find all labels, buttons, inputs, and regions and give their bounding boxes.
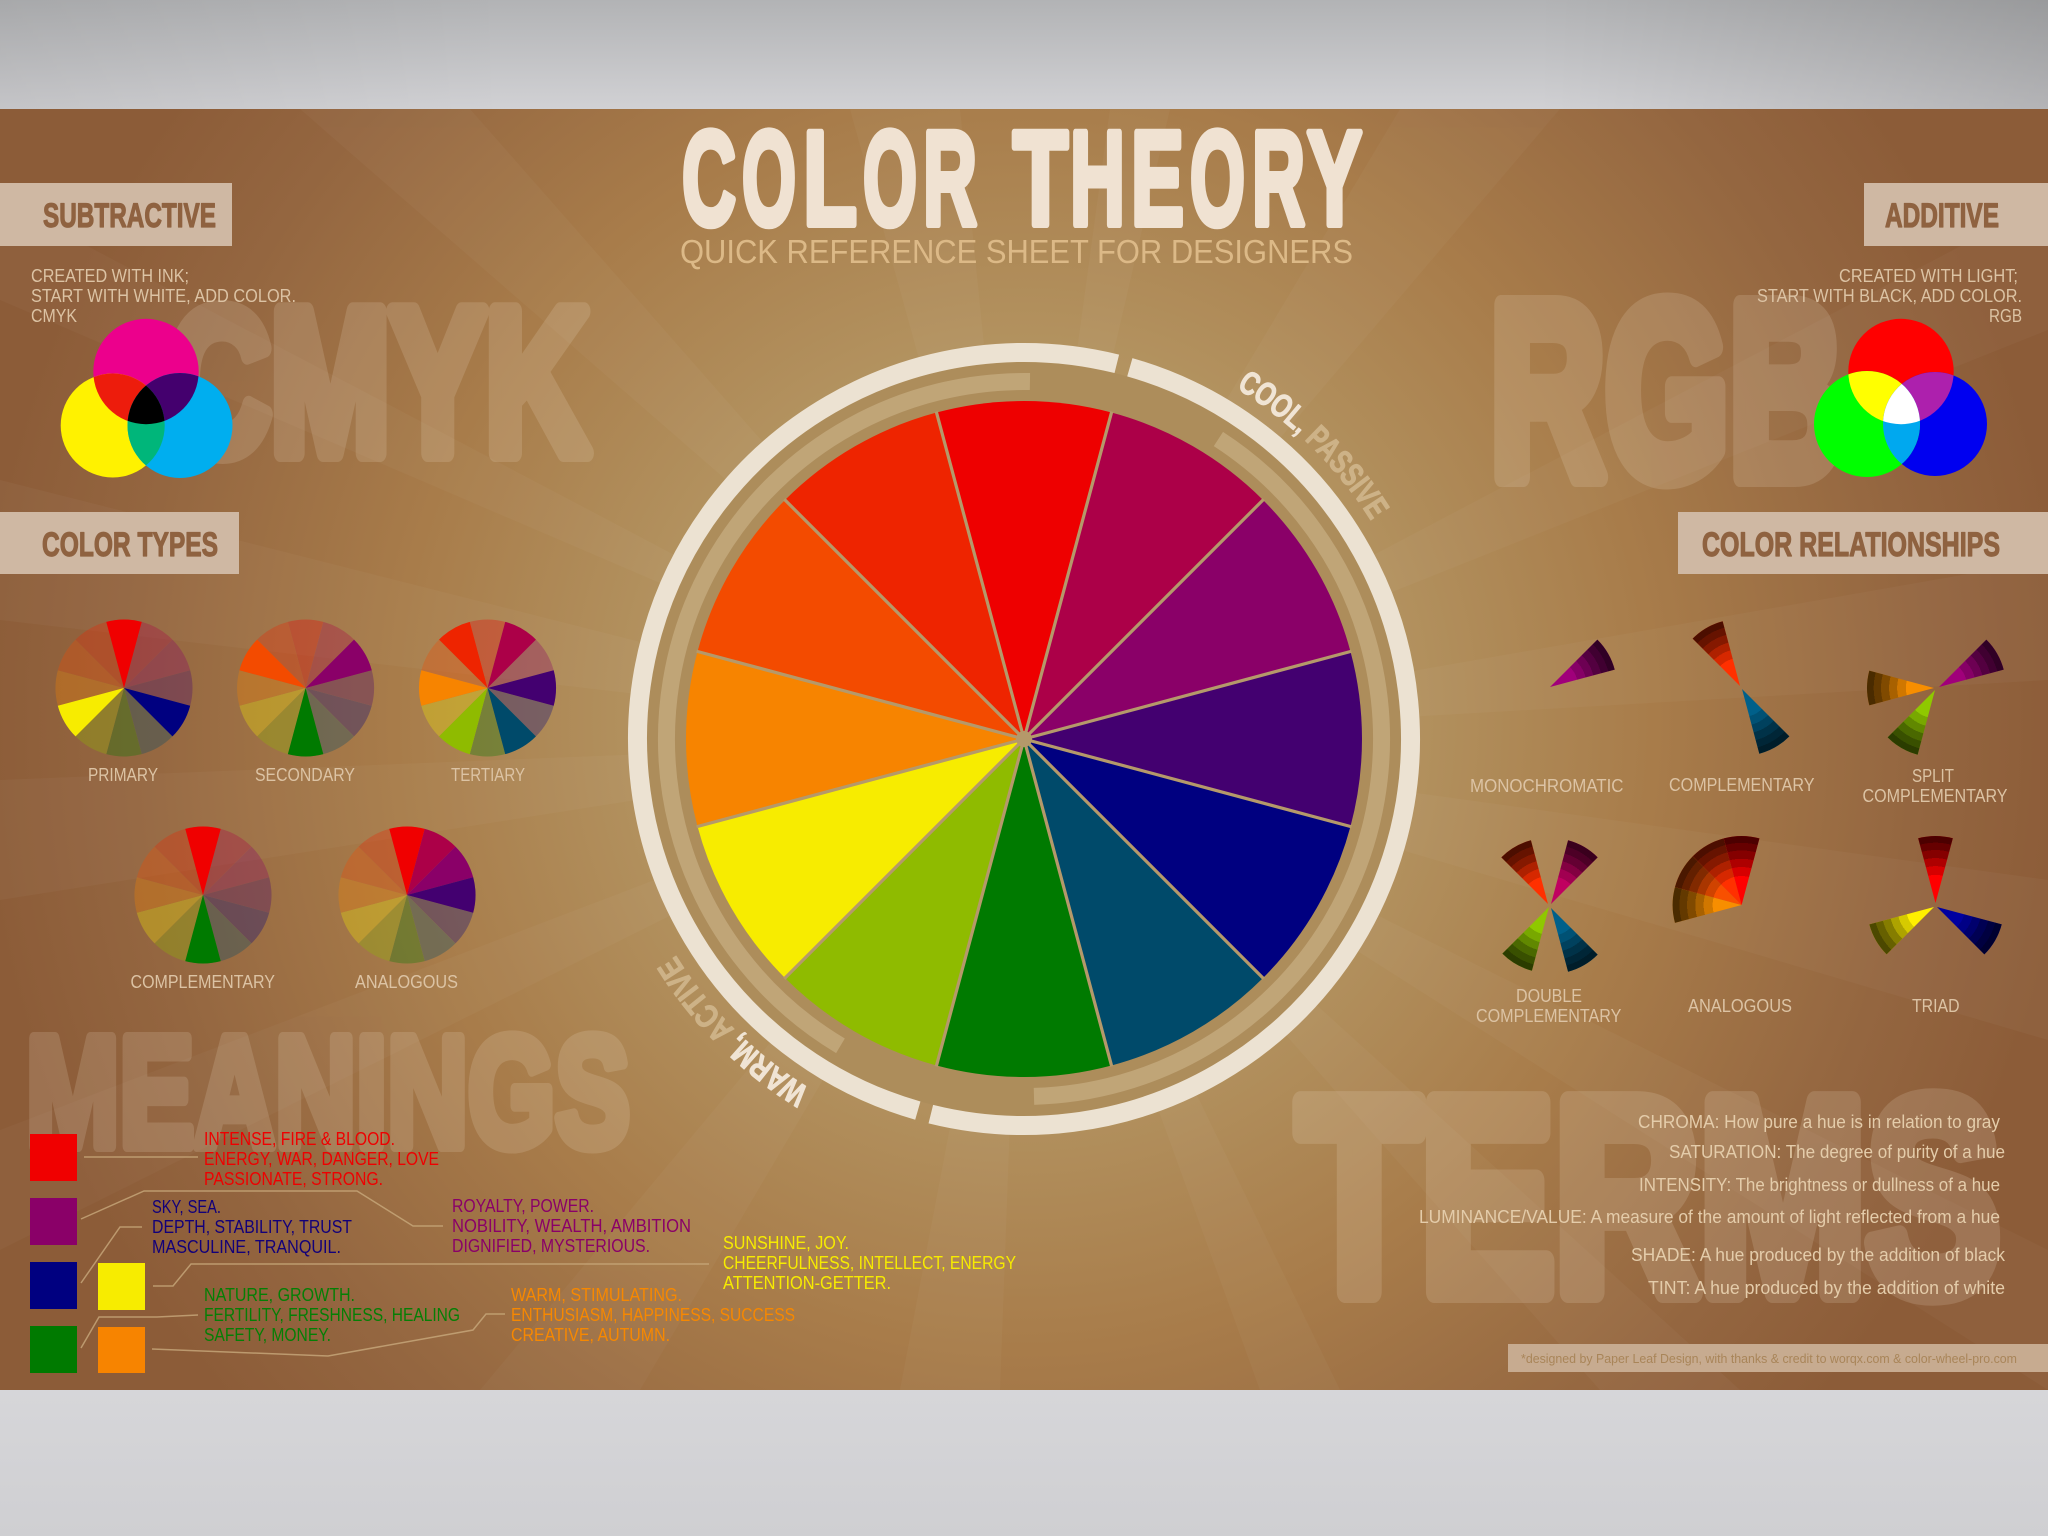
chart: main color wheel bbox=[533, 248, 1515, 1230]
title: C bbox=[682, 104, 736, 254]
label: triad: TRIAD bbox=[1912, 996, 1960, 1016]
icon: RGB venn diagram bbox=[1814, 319, 1987, 477]
legend: meanings swatches bbox=[30, 1134, 145, 1373]
panel: subtractive heading bbox=[0, 183, 232, 246]
wheel wedges bbox=[686, 401, 1362, 1077]
title: R bbox=[923, 104, 977, 254]
label: cool, passive arc text: COOL, PASSIVE bbox=[1240, 372, 1390, 520]
title: L bbox=[803, 104, 857, 254]
panel: additive heading bbox=[1864, 183, 2048, 246]
text: purple meaning: NOBILITY, WEALTH, AMBITION bbox=[452, 1216, 691, 1236]
pie: secondary bbox=[237, 620, 374, 756]
ghost word: CMYK: CMYK bbox=[167, 267, 589, 497]
text: subtractive description: CMYK bbox=[31, 306, 77, 326]
text: additive description: START WITH BLACK, ADD COLOR. bbox=[1757, 286, 2022, 306]
title: O bbox=[863, 104, 917, 254]
label: primary: PRIMARY bbox=[88, 765, 158, 785]
panel: color types heading: COLOR TYPES bbox=[42, 526, 218, 564]
text: terms definitions: CHROMA: How pure a hue is in relation to gray bbox=[1638, 1112, 2000, 1132]
text: orange meaning: CREATIVE, AUTUMN. bbox=[511, 1325, 670, 1345]
label: warm, active arc text: WARM, ACTIVE bbox=[656, 956, 806, 1108]
footer credit bbox=[1508, 1344, 2048, 1372]
text: terms definitions: SHADE: A hue produced by the addition of black bbox=[1631, 1245, 2006, 1265]
label: complementary: COMPLEMENTARY bbox=[130, 972, 275, 992]
text: additive description bbox=[1757, 266, 2022, 326]
text: purple meaning: DIGNIFIED, MYSTERIOUS. bbox=[452, 1236, 650, 1256]
text: terms definitions: INTENSITY: The brightness or dullness of a hue bbox=[1639, 1175, 2000, 1195]
label: analogous relationship: ANALOGOUS bbox=[1688, 996, 1792, 1016]
icon: CMY venn diagram bbox=[61, 319, 232, 478]
text: terms definitions: LUMINANCE/VALUE: A measure of the amount of light reflected from a hue bbox=[1419, 1207, 2000, 1227]
wedge separators bbox=[697, 412, 1351, 1066]
subtitle: QUICK REFERENCE SHEET FOR DESIGNERS bbox=[680, 233, 1353, 270]
label: split complementary: SPLIT bbox=[1912, 766, 1954, 786]
text: purple meaning: ROYALTY, POWER. bbox=[452, 1196, 594, 1216]
text: yellow meaning: ATTENTION-GETTER. bbox=[723, 1273, 891, 1293]
pie: primary bbox=[56, 620, 192, 756]
label: analogous: ANALOGOUS bbox=[355, 972, 458, 992]
text: red meaning bbox=[204, 1129, 439, 1189]
text: orange meaning: WARM, STIMULATING. bbox=[511, 1285, 682, 1305]
panel: subtractive heading: SUBTRACTIVE bbox=[43, 197, 216, 235]
text: blue meaning: DEPTH, STABILITY, TRUST bbox=[152, 1217, 352, 1237]
title: H bbox=[1070, 104, 1125, 254]
title: O bbox=[1190, 104, 1245, 254]
label: double complementary: DOUBLE bbox=[1516, 986, 1582, 1006]
label: secondary: SECONDARY bbox=[255, 765, 355, 785]
title: Y bbox=[1307, 104, 1362, 254]
text: yellow meaning: SUNSHINE, JOY. bbox=[723, 1233, 849, 1253]
text: green meaning bbox=[204, 1285, 460, 1345]
text: green meaning: SAFETY, MONEY. bbox=[204, 1325, 331, 1345]
text: red meaning: ENERGY, WAR, DANGER, LOVE bbox=[204, 1149, 439, 1169]
panel: color types heading bbox=[0, 512, 239, 574]
panel: additive heading: ADDITIVE bbox=[1885, 197, 1999, 235]
text: purple meaning bbox=[452, 1196, 691, 1256]
text: subtractive description: START WITH WHITE, ADD COLOR. bbox=[31, 286, 296, 306]
title: E bbox=[1131, 104, 1184, 254]
text: subtractive description bbox=[31, 266, 296, 326]
text: green meaning: FERTILITY, FRESHNESS, HEALING bbox=[204, 1305, 460, 1325]
text: blue meaning: SKY, SEA. bbox=[152, 1197, 221, 1217]
text: orange meaning bbox=[511, 1285, 795, 1345]
outer ring bbox=[546, 261, 1502, 1217]
label: complementary relationship: COMPLEMENTARY bbox=[1669, 775, 1814, 795]
icon: split complementary wedges bbox=[1867, 638, 2006, 757]
text: additive description: RGB bbox=[1989, 306, 2022, 326]
title: T bbox=[1013, 104, 1068, 254]
ghost word: RGB: RGB bbox=[1490, 251, 1844, 530]
label: monochromatic: MONOCHROMATIC bbox=[1470, 776, 1624, 796]
icon: complementary wedges bbox=[1691, 619, 1791, 756]
icon: analogous wedges bbox=[1673, 836, 1759, 923]
ghost word: MEANINGS: MEANINGS bbox=[26, 1005, 630, 1180]
footer credit: *designed by Paper Leaf Design, with thanks & credit to worqx.com & color-wheel-pro.com bbox=[1521, 1351, 2017, 1366]
text: additive description: CREATED WITH LIGHT; bbox=[1839, 266, 2018, 286]
title: O bbox=[742, 104, 796, 254]
icon: monochromatic wedge bbox=[1541, 638, 1617, 702]
label: split complementary: COMPLEMENTARY bbox=[1862, 786, 2008, 806]
text: terms definitions: SATURATION: The degree of purity of a hue bbox=[1669, 1142, 2005, 1162]
label: double complementary bbox=[1476, 986, 1621, 1026]
text: yellow meaning bbox=[723, 1233, 1016, 1293]
text: red meaning: INTENSE, FIRE & BLOOD. bbox=[204, 1129, 395, 1149]
text: orange meaning: ENTHUSIASM, HAPPINESS, SUCCESS bbox=[511, 1305, 795, 1325]
icon: double complementary wedges bbox=[1500, 838, 1599, 974]
label: tertiary: TERTIARY bbox=[451, 765, 525, 785]
pie: tertiary bbox=[419, 620, 556, 756]
text: terms definitions bbox=[1419, 1112, 2006, 1298]
pie: analogous bbox=[339, 827, 475, 963]
text: terms definitions: TINT: A hue produced by the addition of white bbox=[1648, 1278, 2005, 1298]
label: split complementary bbox=[1862, 766, 2008, 806]
title: R bbox=[1252, 104, 1305, 254]
text: subtractive description: CREATED WITH INK; bbox=[31, 266, 189, 286]
label: double complementary: COMPLEMENTARY bbox=[1476, 1006, 1621, 1026]
text: blue meaning: MASCULINE, TRANQUIL. bbox=[152, 1237, 341, 1257]
icon: triad wedges bbox=[1867, 836, 2004, 956]
panel: color relationships heading bbox=[1678, 512, 2048, 574]
text: yellow meaning: CHEERFULNESS, INTELLECT, ENERGY bbox=[723, 1253, 1016, 1273]
inner accent bands bbox=[533, 248, 1515, 1230]
pie: complementary bbox=[135, 827, 271, 963]
text: red meaning: PASSIONATE, STRONG. bbox=[204, 1169, 383, 1189]
text: green meaning: NATURE, GROWTH. bbox=[204, 1285, 355, 1305]
text: blue meaning bbox=[152, 1197, 352, 1257]
